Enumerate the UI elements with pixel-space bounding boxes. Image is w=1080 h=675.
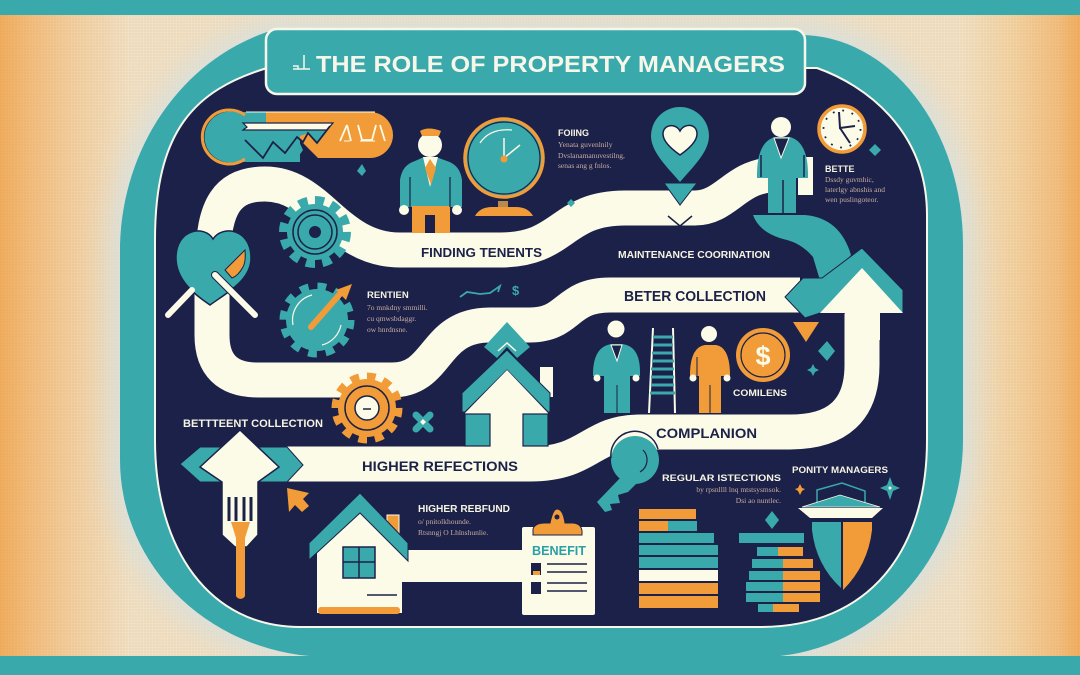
- text block: rentien: cu qmwsbdaggr.: [367, 314, 416, 323]
- icon: orange pointer: [287, 488, 309, 512]
- icon: heart with crossed arrows: [168, 231, 255, 315]
- icon: location pin with heart: [651, 107, 709, 226]
- panel: navy board: [155, 68, 927, 627]
- icon: ladder: [649, 328, 675, 413]
- icon: wall clock: [819, 106, 865, 152]
- icon: dollar coin: [736, 328, 790, 382]
- text block: bette: Dssdy guvmhic,: [825, 175, 874, 184]
- icon: bottom house: [309, 493, 408, 614]
- icon: small sparkline and dollar: [460, 283, 520, 298]
- text block: rentien: RENTIEN: [367, 290, 409, 301]
- title banner: [266, 29, 805, 94]
- icon: teal swoosh to house arrow: [753, 215, 851, 287]
- label: higher refections: HIGHER REFECTIONS: [362, 458, 518, 474]
- icon: small diamond near key: [357, 164, 366, 176]
- icon: manager with orange tie: [399, 128, 462, 233]
- text block: higher refund: Rtsnngj O Lhlnshunlie.: [418, 528, 488, 537]
- path: house to clipboard connector: [400, 550, 525, 582]
- text block: regular inspections: [662, 473, 781, 505]
- icon: teal cross: [416, 415, 430, 429]
- icon: teal key: [597, 431, 659, 512]
- panel: teal rounded frame: [120, 32, 963, 657]
- text block: foiing: Dvslanamanuvestilng,: [558, 151, 625, 160]
- text block: foiing: senas ang g fnlos.: [558, 161, 611, 170]
- text: ponity managers: PONITY MANAGERS: [792, 465, 888, 476]
- text block: bette: [825, 164, 885, 204]
- icon: small sparkline and dollar: $: [512, 283, 520, 298]
- icon: sparkles: [795, 477, 900, 500]
- icon: central house: [462, 322, 553, 447]
- label: comilens: COMILENS: [733, 388, 787, 399]
- text block: bette: BETTE: [825, 164, 855, 174]
- icon: teal gear: [284, 201, 346, 263]
- icon: small teal diamond: [765, 511, 779, 529]
- label: bettteent collection: BETTTEENT COLLECTION: [183, 418, 323, 430]
- label: better collection: BETER COLLECTION: [624, 289, 766, 305]
- icon: shield with roof: [798, 483, 883, 590]
- text block: bette: wen puslingoteor.: [825, 195, 878, 204]
- text block: foiing: Yenata guvenlnily: [558, 140, 613, 149]
- icon: manager standing: [757, 117, 813, 213]
- label: finding tenents: FINDING TENENTS: [421, 245, 542, 260]
- icon: dollar coin: $: [755, 341, 771, 371]
- icon: orange gear: [336, 377, 398, 439]
- title banner: THE ROLE OF PROPERTY MANAGERS: [316, 51, 785, 77]
- icon: teal diamond and sparkle: [807, 341, 835, 376]
- text block: regular inspections: REGULAR ISTECTIONS: [662, 473, 781, 484]
- icon: manager in suit: [593, 320, 640, 413]
- path: upper winding road: [213, 175, 770, 262]
- arrow: left fork arrow: [180, 430, 303, 599]
- text block: rentien: 7o mnkdny smmilli.: [367, 303, 428, 312]
- icon: small diamond by pin: [567, 199, 575, 207]
- arrow: house up arrow top right: [785, 248, 903, 340]
- icon: clipboard benefit: BENEFIT: [532, 544, 586, 558]
- label: maintenance coordination: MAINTENANCE COORINATION: [618, 249, 770, 261]
- text block: higher refund: [418, 504, 510, 537]
- path: middle winding road: [212, 285, 800, 380]
- text block: higher refund: o/ pnitolkhounde.: [418, 517, 471, 526]
- label: complanion: COMPLANION: [656, 425, 757, 441]
- text block: regular inspections: by rpsnllll lnq mtstsysmsok.: [696, 485, 781, 494]
- text block: higher refund: HIGHER REBFUND: [418, 504, 510, 515]
- icon: diamond by wall clock: [869, 144, 881, 156]
- chart: left stacked bars: [639, 509, 718, 608]
- icon: key top left: [202, 110, 393, 164]
- icon: round clock on stand: [465, 119, 543, 216]
- text block: foiing: [558, 128, 625, 170]
- text block: foiing: FOIING: [558, 128, 589, 138]
- icon: orange triangle: [793, 322, 819, 342]
- icon: gear with pencil: [284, 284, 352, 353]
- text block: rentien: ow hnrdnsne.: [367, 325, 408, 334]
- icon: person in orange: [690, 326, 730, 413]
- icon: clipboard benefit: [522, 509, 595, 615]
- text block: regular inspections: Dsi ao nuntlec.: [736, 496, 781, 505]
- path: lower winding road: [285, 300, 862, 464]
- text block: rentien: [367, 290, 428, 334]
- chart: right stacked bars: [739, 533, 820, 612]
- text block: bette: laterlgy abnshis and: [825, 185, 885, 194]
